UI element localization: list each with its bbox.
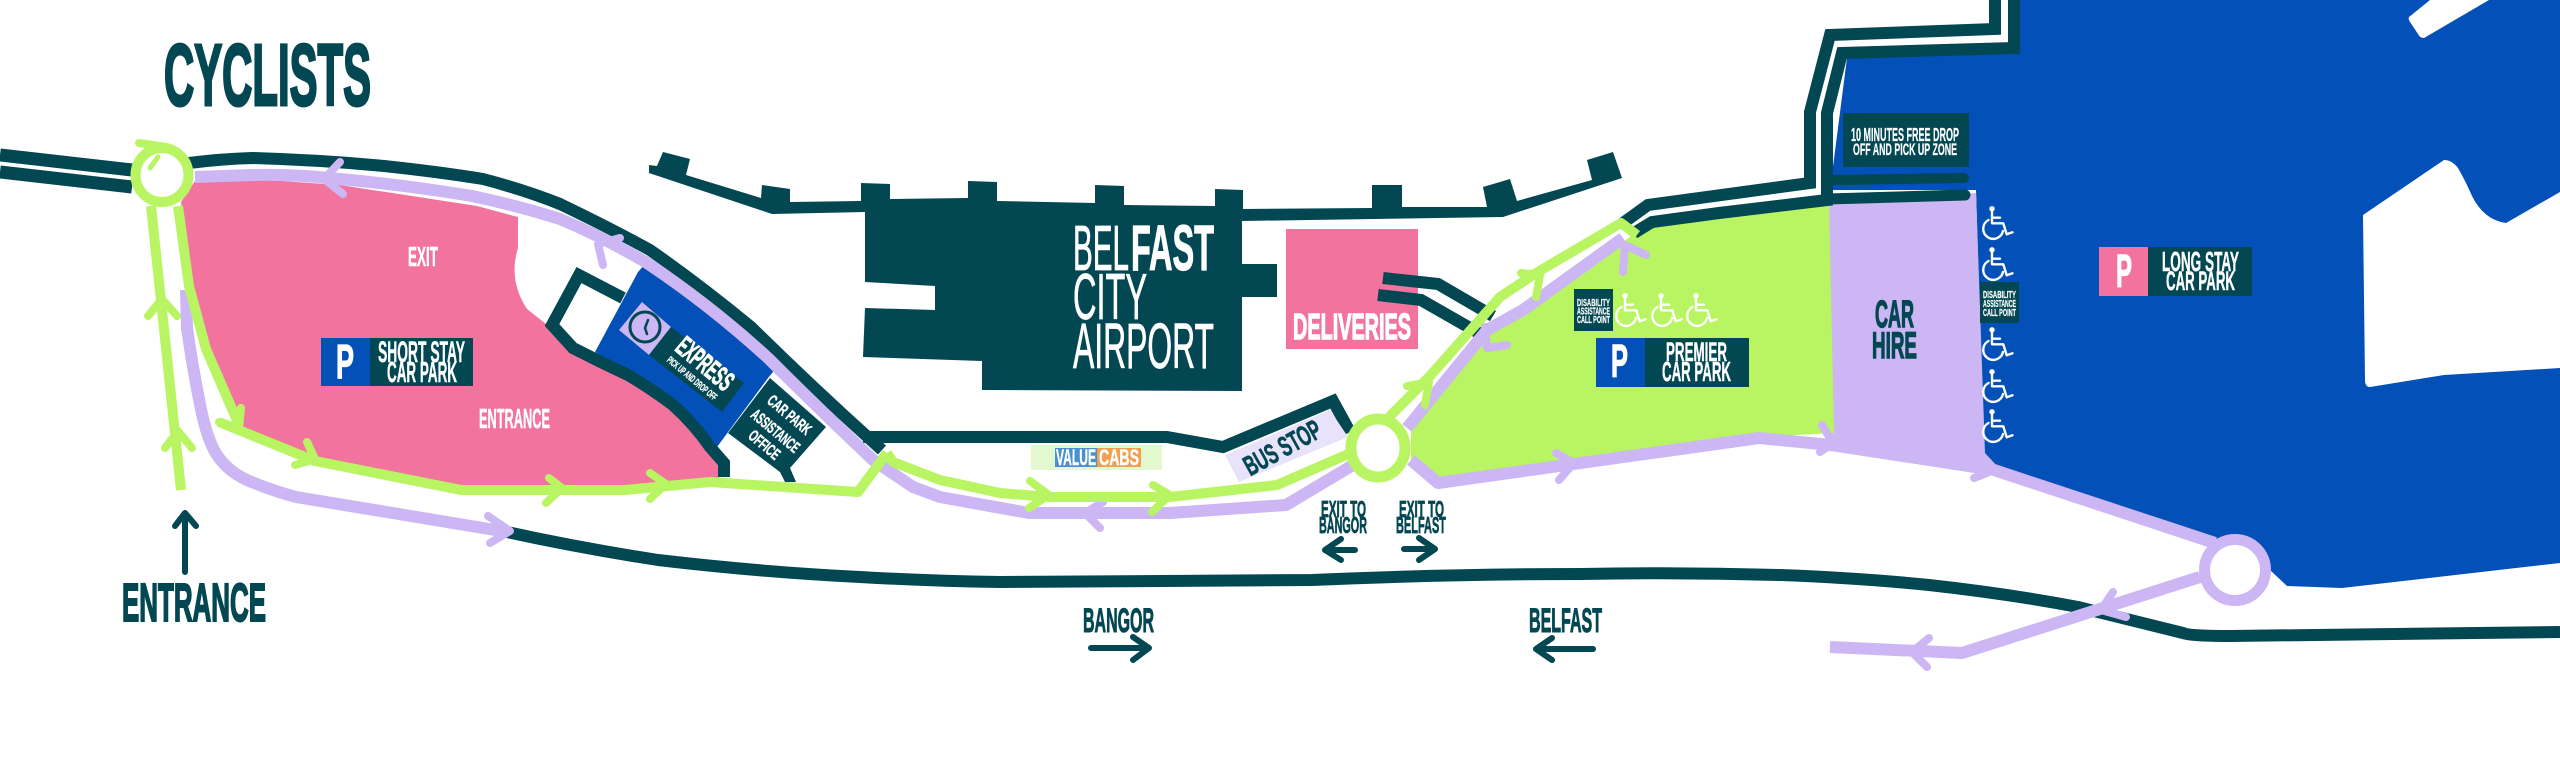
label: car hire: HIRE: [1872, 325, 1917, 366]
sign: premier car park: PREMIER: [1666, 337, 1727, 367]
value cabs: CABS: [1099, 445, 1139, 470]
airport map: CYCLISTS: [164, 27, 371, 124]
sign: premier car park: CAR PARK: [1662, 356, 1731, 387]
bus stop: BUS STOP: [1238, 414, 1327, 482]
value cabs: [1031, 445, 1162, 470]
sign: disability assistance, premier: CALL POINT: [1577, 315, 1610, 326]
sign: short stay car park: [321, 336, 473, 389]
arrows: lavender route: [324, 162, 2126, 667]
express label: EXPRESS: [670, 331, 740, 397]
sign: disability assistance, long stay: ASSISTANCE: [1983, 299, 2016, 310]
label: exit to bangor: EXIT TO: [1321, 496, 1366, 522]
sign: disability assistance, long stay: CALL POINT: [1983, 308, 2016, 319]
panel: express pick up and drop off area: [595, 262, 777, 447]
terminal label: [1073, 212, 1214, 382]
airport map: ENTRANCE: [479, 403, 550, 434]
sign: free drop off zone: 10 MINUTES FREE DROP: [1851, 125, 1959, 145]
airport map: BELFAST: [1529, 602, 1602, 640]
sign: premier car park: P: [1611, 335, 1628, 387]
label: car hire: [1872, 294, 1917, 366]
label: bangor: [1083, 602, 1154, 660]
label: belfast: [1529, 602, 1602, 660]
car park assistance office: [728, 378, 826, 482]
green entrance route: [139, 143, 1637, 512]
airport map: EXIT: [408, 241, 438, 272]
delivery road: [1378, 278, 1493, 336]
label: exit to belfast: EXIT TO: [1399, 496, 1444, 522]
roundabout: cyclists: [136, 148, 188, 202]
sign: long stay car park: CAR PARK: [2166, 266, 2235, 296]
sign: disability assistance, premier: ASSISTANCE: [1577, 306, 1610, 318]
sign: free drop off zone: OFF AND PICK UP ZONE: [1853, 140, 1957, 159]
sign: disability assistance, long stay: [1980, 282, 2019, 323]
car park assistance office: CAR PARK: [764, 392, 814, 439]
roundabout: long stay: [2204, 540, 2266, 600]
icons: wheelchair spaces, long stay: [1983, 206, 2012, 442]
deliveries: [1286, 229, 1418, 349]
car park assistance office: ASSISTANCE: [747, 406, 803, 457]
arrow: entrance: [175, 513, 196, 572]
car park assistance office: OFFICE: [745, 427, 783, 464]
terminal building: AIRPORT: [1073, 310, 1214, 382]
sign: free drop off zone: [1843, 113, 1969, 167]
sign: long stay car park: [2099, 245, 2252, 297]
bus stop: [1225, 410, 1348, 482]
panel: car hire area: [1829, 193, 1998, 467]
panel: premier car park area: [1411, 203, 1834, 482]
icon: clock badge: [619, 302, 671, 355]
sign: disability assistance, long stay: DISABILITY: [1983, 290, 2016, 301]
terminal building: [649, 152, 1622, 391]
airport map: ENTRANCE: [122, 573, 266, 633]
express label: PICK UP AND DROP OFF: [664, 355, 719, 403]
arrows: green route: [139, 143, 1540, 512]
terminal label: BEL: [1073, 212, 1129, 284]
airport map: BELFAST: [1396, 512, 1446, 538]
sign: disability assistance, premier: [1574, 289, 1613, 331]
sign: long stay car park: P: [2116, 245, 2132, 297]
panel: long stay car park area: [1830, 0, 2560, 588]
deliveries: DELIVERIES: [1293, 306, 1411, 347]
panel: short stay car park area: [181, 179, 719, 486]
label: exit to bangor: [1319, 496, 1367, 560]
roundabout: terminal: [1351, 419, 1405, 477]
express access road outline: [552, 275, 724, 477]
icons: wheelchair spaces, premier: [1616, 293, 1716, 326]
sign: short stay car park: SHORT STAY: [378, 336, 465, 369]
terminal label: CITY: [1073, 260, 1147, 333]
express label: [649, 327, 744, 412]
sign: disability assistance, premier: DISABILITY: [1577, 298, 1610, 309]
lavender exit route: [186, 162, 2215, 667]
sign: short stay car park: P: [336, 336, 354, 389]
sign: premier car park: [1596, 335, 1749, 387]
terminal label: FAST: [1131, 212, 1214, 284]
label: exit to belfast: [1396, 496, 1446, 560]
value cabs: VALUE: [1056, 445, 1096, 470]
airport map: BANGOR: [1319, 512, 1367, 538]
sign: long stay car park: LONG STAY: [2162, 246, 2239, 277]
sign: short stay car park: CAR PARK: [387, 357, 457, 389]
label: car hire: CAR: [1875, 294, 1914, 336]
airport map: BANGOR: [1083, 602, 1154, 640]
